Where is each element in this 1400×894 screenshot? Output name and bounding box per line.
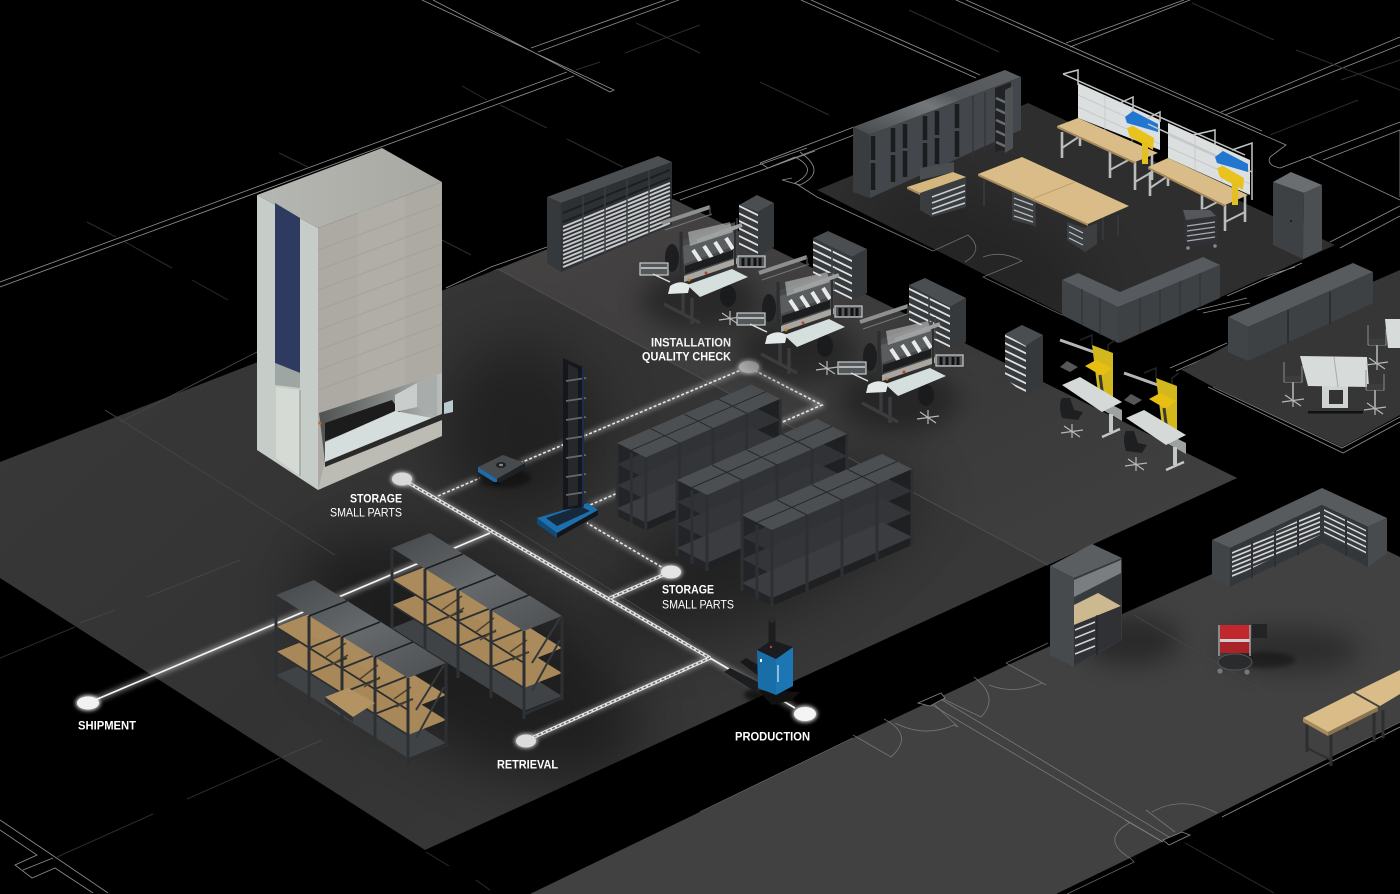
- cabinet with wood worktop: [1050, 544, 1122, 667]
- node: installation: [738, 360, 760, 374]
- label: retrieval: RETRIEVAL: [497, 758, 558, 772]
- shelf rack row 1: [617, 384, 780, 530]
- vertical lift storage tower: [257, 148, 453, 490]
- node: storage small parts A: [391, 472, 413, 486]
- workbench 1: [1057, 70, 1245, 190]
- wood table pair, production: [1303, 670, 1400, 766]
- label: storage small parts B: STORAGE: [662, 582, 714, 596]
- drawer cabinet 1: [739, 195, 774, 257]
- AGV robot small: [475, 455, 531, 488]
- pallet rack with wood shelves: rear: [392, 533, 562, 719]
- long sideboard cabinet: [1228, 263, 1373, 361]
- L-shaped drawer cabinet: [1212, 488, 1387, 587]
- label: shipment: SHIPMENT: [78, 718, 137, 732]
- label: storage small parts A: [330, 492, 402, 520]
- drawer cabinet near yellow stations: [1005, 325, 1043, 395]
- drawer cabinet 3: [909, 278, 966, 350]
- floor: assembly zone: [498, 199, 1237, 565]
- drawer cabinet 2: [813, 231, 867, 300]
- wide drawer cabinet: [547, 156, 672, 272]
- node: shipment: [76, 696, 100, 710]
- forklift robot: [724, 617, 800, 705]
- meeting table with chairs: [1282, 319, 1400, 415]
- floor: main warehouse: [0, 199, 1237, 850]
- installation workstation 3: [838, 306, 963, 431]
- label: production: PRODUCTION: [735, 730, 810, 744]
- central wood table: [978, 157, 1129, 252]
- label: storage small parts B: [662, 582, 734, 612]
- route lines: [88, 367, 822, 741]
- installation workstation 2: [737, 257, 862, 382]
- floor: workshop room: [817, 103, 1335, 343]
- yellow panel station 2: [1124, 368, 1186, 471]
- tower robot: [537, 358, 598, 538]
- floor: meeting room: [1182, 270, 1400, 447]
- L-shaped low cabinet: [1062, 257, 1220, 343]
- yellow panel station 1: [1060, 335, 1122, 438]
- pallet rack with wood shelves: front: [276, 580, 446, 766]
- small tool trolley: [1183, 209, 1217, 250]
- label: storage small parts B: SMALL PARTS: [662, 598, 734, 612]
- label: installation quality check: QUALITY CHECK: [642, 350, 731, 364]
- label: installation quality check: [642, 336, 731, 364]
- floor shadows and interior plan lines: [80, 157, 1360, 894]
- tool cart with wood top: [907, 162, 966, 217]
- floor: production hall: [530, 520, 1400, 894]
- workbench 2: [1148, 123, 1252, 231]
- installation workstation 1: [640, 207, 765, 332]
- tall storage cabinet wall: [853, 70, 1021, 198]
- red bin trolley: [1217, 624, 1295, 675]
- node: storage small parts B: [660, 565, 682, 579]
- label: installation quality check: INSTALLATION: [651, 336, 731, 350]
- node: retrieval: [515, 734, 537, 748]
- label: storage small parts A: SMALL PARTS: [330, 506, 402, 520]
- tall two-door cabinet: [1273, 172, 1322, 259]
- label: storage small parts A: STORAGE: [350, 492, 402, 506]
- shelf rack row 2: [677, 419, 847, 571]
- shelf rack row 3: [742, 454, 912, 606]
- node: production: [793, 706, 817, 722]
